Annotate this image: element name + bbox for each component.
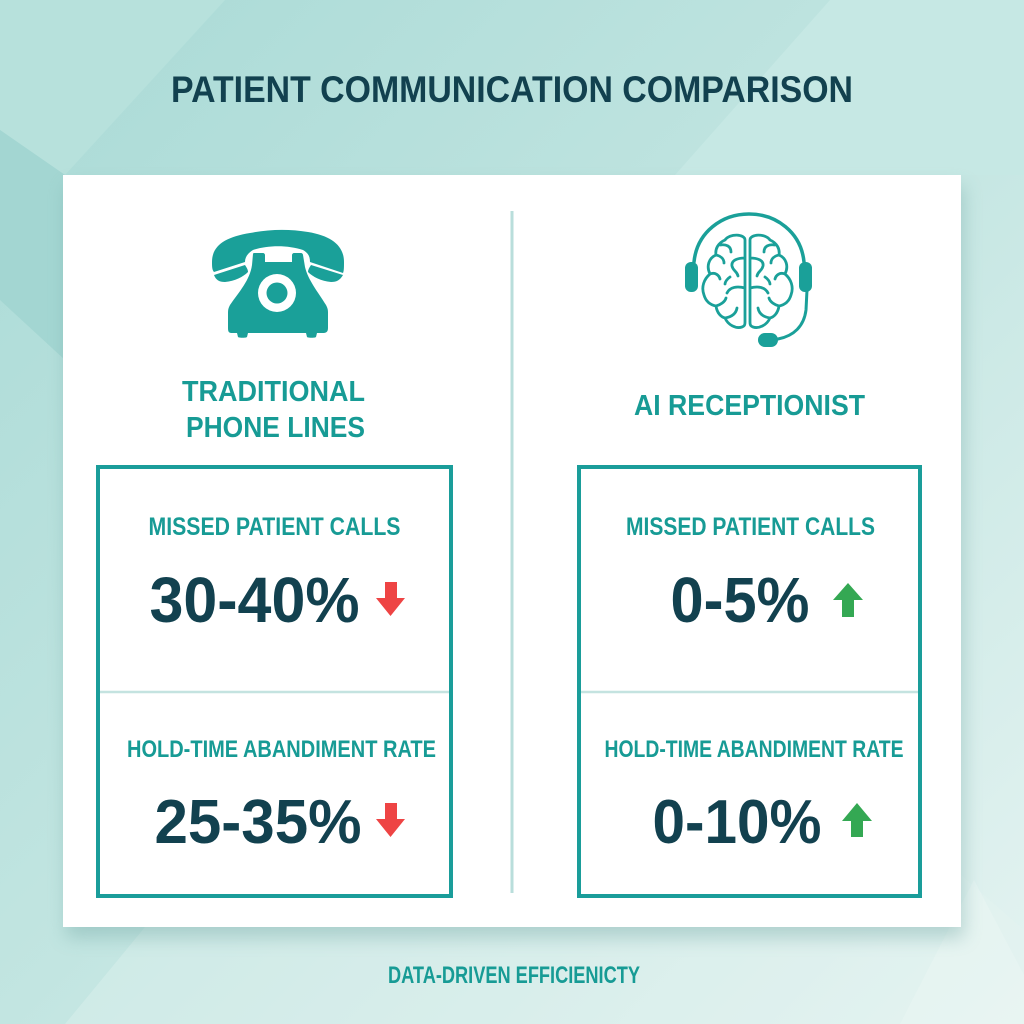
value: 25-35%: 25-35% (154, 788, 362, 857)
panel: traditional metrics (98, 467, 451, 896)
heading: AI receptionist: AI RECEPTIONIST (634, 390, 865, 422)
title: PATIENT COMMUNICATION COMPARISON (171, 69, 853, 110)
label: missed patient calls: MISSED PATIENT CALLS (626, 513, 875, 541)
icon: red down arrow (376, 803, 405, 837)
heading: traditional phone lines (182, 376, 365, 444)
panel: comparison card (63, 175, 964, 938)
panel: AI metrics (579, 467, 920, 896)
icon: green up arrow (833, 583, 863, 617)
heading: traditional phone lines: TRADITIONAL (182, 376, 365, 408)
icon: telephone (212, 230, 344, 338)
icon: brain with headset (685, 214, 812, 347)
icon: green up arrow (842, 803, 872, 837)
value: 0-5%: 0-5% (670, 564, 810, 636)
label: hold-time abandiment rate: HOLD-TIME ABANDIMENT RATE (604, 736, 904, 763)
right brain hemisphere (750, 235, 792, 328)
value: 0-10%: 0-10% (652, 788, 822, 857)
icon: red down arrow (376, 582, 405, 616)
value: 30-40%: 30-40% (150, 564, 360, 636)
heading: traditional phone lines: PHONE LINES (186, 412, 365, 444)
label: missed patient calls: MISSED PATIENT CALLS (148, 513, 400, 541)
left brain hemisphere (703, 235, 745, 328)
label: hold-time abandiment rate: HOLD-TIME ABANDIMENT RATE (127, 736, 436, 763)
footer: DATA-DRIVEN EFFICIENICTY (388, 962, 640, 989)
